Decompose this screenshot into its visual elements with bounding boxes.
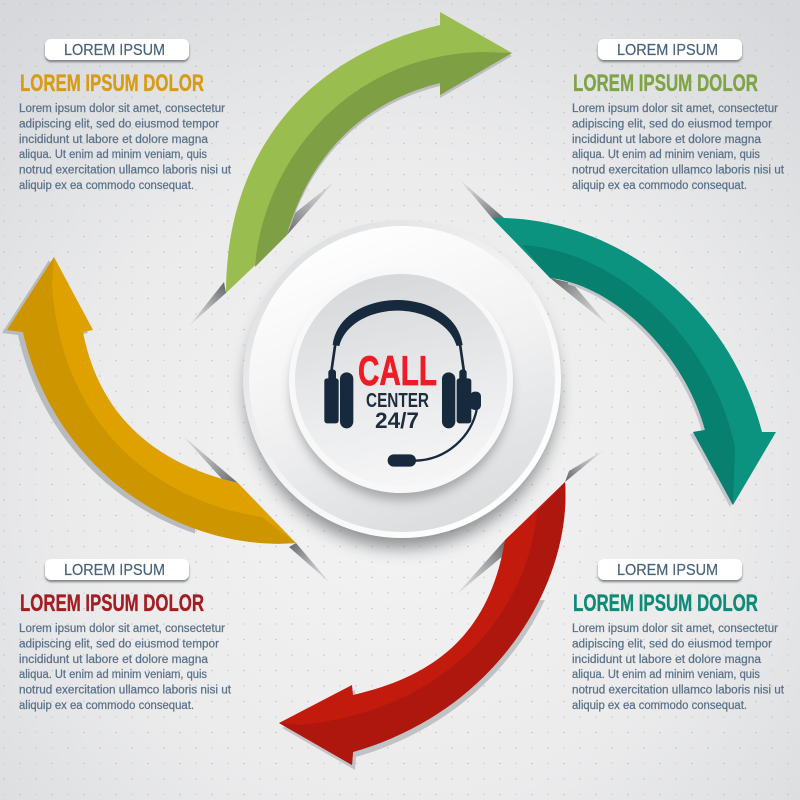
panel: top left: aliqua. Ut enim ad minim veniam, quis [19, 149, 207, 161]
panel: top right: Lorem ipsum dolor sit amet, consectetur [572, 103, 778, 115]
panel: top left: notrud exercitation ullamco laboris nisi ut [19, 165, 232, 177]
panel: top left: aliquip ex ea commodo consequat. [19, 180, 194, 192]
panel: bottom right: adipiscing elit, sed do eiusmod tempor [572, 638, 772, 650]
slit shadows behind arrows [182, 180, 608, 595]
panel: top right: incididunt ut labore et dolore magna [572, 134, 762, 146]
panel: top left: LOREM IPSUM [64, 42, 165, 59]
panel: bottom right: Lorem ipsum dolor sit amet, consectetur [572, 623, 778, 635]
center label: CENTER [366, 389, 429, 412]
panel: top right: notrud exercitation ullamco laboris nisi ut [572, 165, 785, 177]
panel: bottom left: incididunt ut labore et dolore magna [19, 654, 209, 666]
panel: top right: adipiscing elit, sed do eiusmod tempor [572, 118, 772, 130]
panel: bottom left: Lorem ipsum dolor sit amet, consectetur [19, 623, 225, 635]
panel: top right: LOREM IPSUM [617, 42, 718, 59]
panel: bottom right: notrud exercitation ullamco laboris nisi ut [572, 685, 785, 697]
arrow: green [226, 12, 512, 296]
panel: bottom left: aliquip ex ea commodo consequat. [19, 700, 194, 712]
panel: top left: incididunt ut labore et dolore magna [19, 134, 209, 146]
arrow: red [279, 482, 568, 770]
panel: top left: LOREM IPSUM DOLOR [20, 70, 204, 97]
center label: CALL [358, 347, 437, 394]
panel: bottom right: aliquip ex ea commodo consequat. [572, 700, 747, 712]
panel: top right: aliqua. Ut enim ad minim veniam, quis [572, 149, 760, 161]
icon: headset [324, 300, 481, 467]
panel: bottom left [19, 559, 232, 712]
panel: top left: adipiscing elit, sed do eiusmod tempor [19, 118, 219, 130]
panel: top left: Lorem ipsum dolor sit amet, consectetur [19, 103, 225, 115]
panel: top right [572, 39, 785, 192]
panel: top right: aliquip ex ea commodo consequat. [572, 180, 747, 192]
panel: bottom right: aliqua. Ut enim ad minim veniam, quis [572, 669, 760, 681]
panel: bottom left: adipiscing elit, sed do eiusmod tempor [19, 638, 219, 650]
arrow: amber [2, 257, 296, 547]
panel: bottom left: aliqua. Ut enim ad minim veniam, quis [19, 669, 207, 681]
central disc [243, 220, 561, 548]
panel: bottom left: LOREM IPSUM DOLOR [20, 590, 204, 617]
panel: top left [19, 39, 232, 192]
panel: bottom left: notrud exercitation ullamco laboris nisi ut [19, 685, 232, 697]
panel: bottom right [572, 559, 785, 712]
panel: bottom left: LOREM IPSUM [64, 562, 165, 579]
panel: bottom right: incididunt ut labore et dolore magna [572, 654, 762, 666]
center label [358, 347, 437, 433]
arrow: teal [489, 218, 776, 507]
panel: bottom right: LOREM IPSUM [617, 562, 718, 579]
center label: 24/7 [375, 408, 419, 433]
